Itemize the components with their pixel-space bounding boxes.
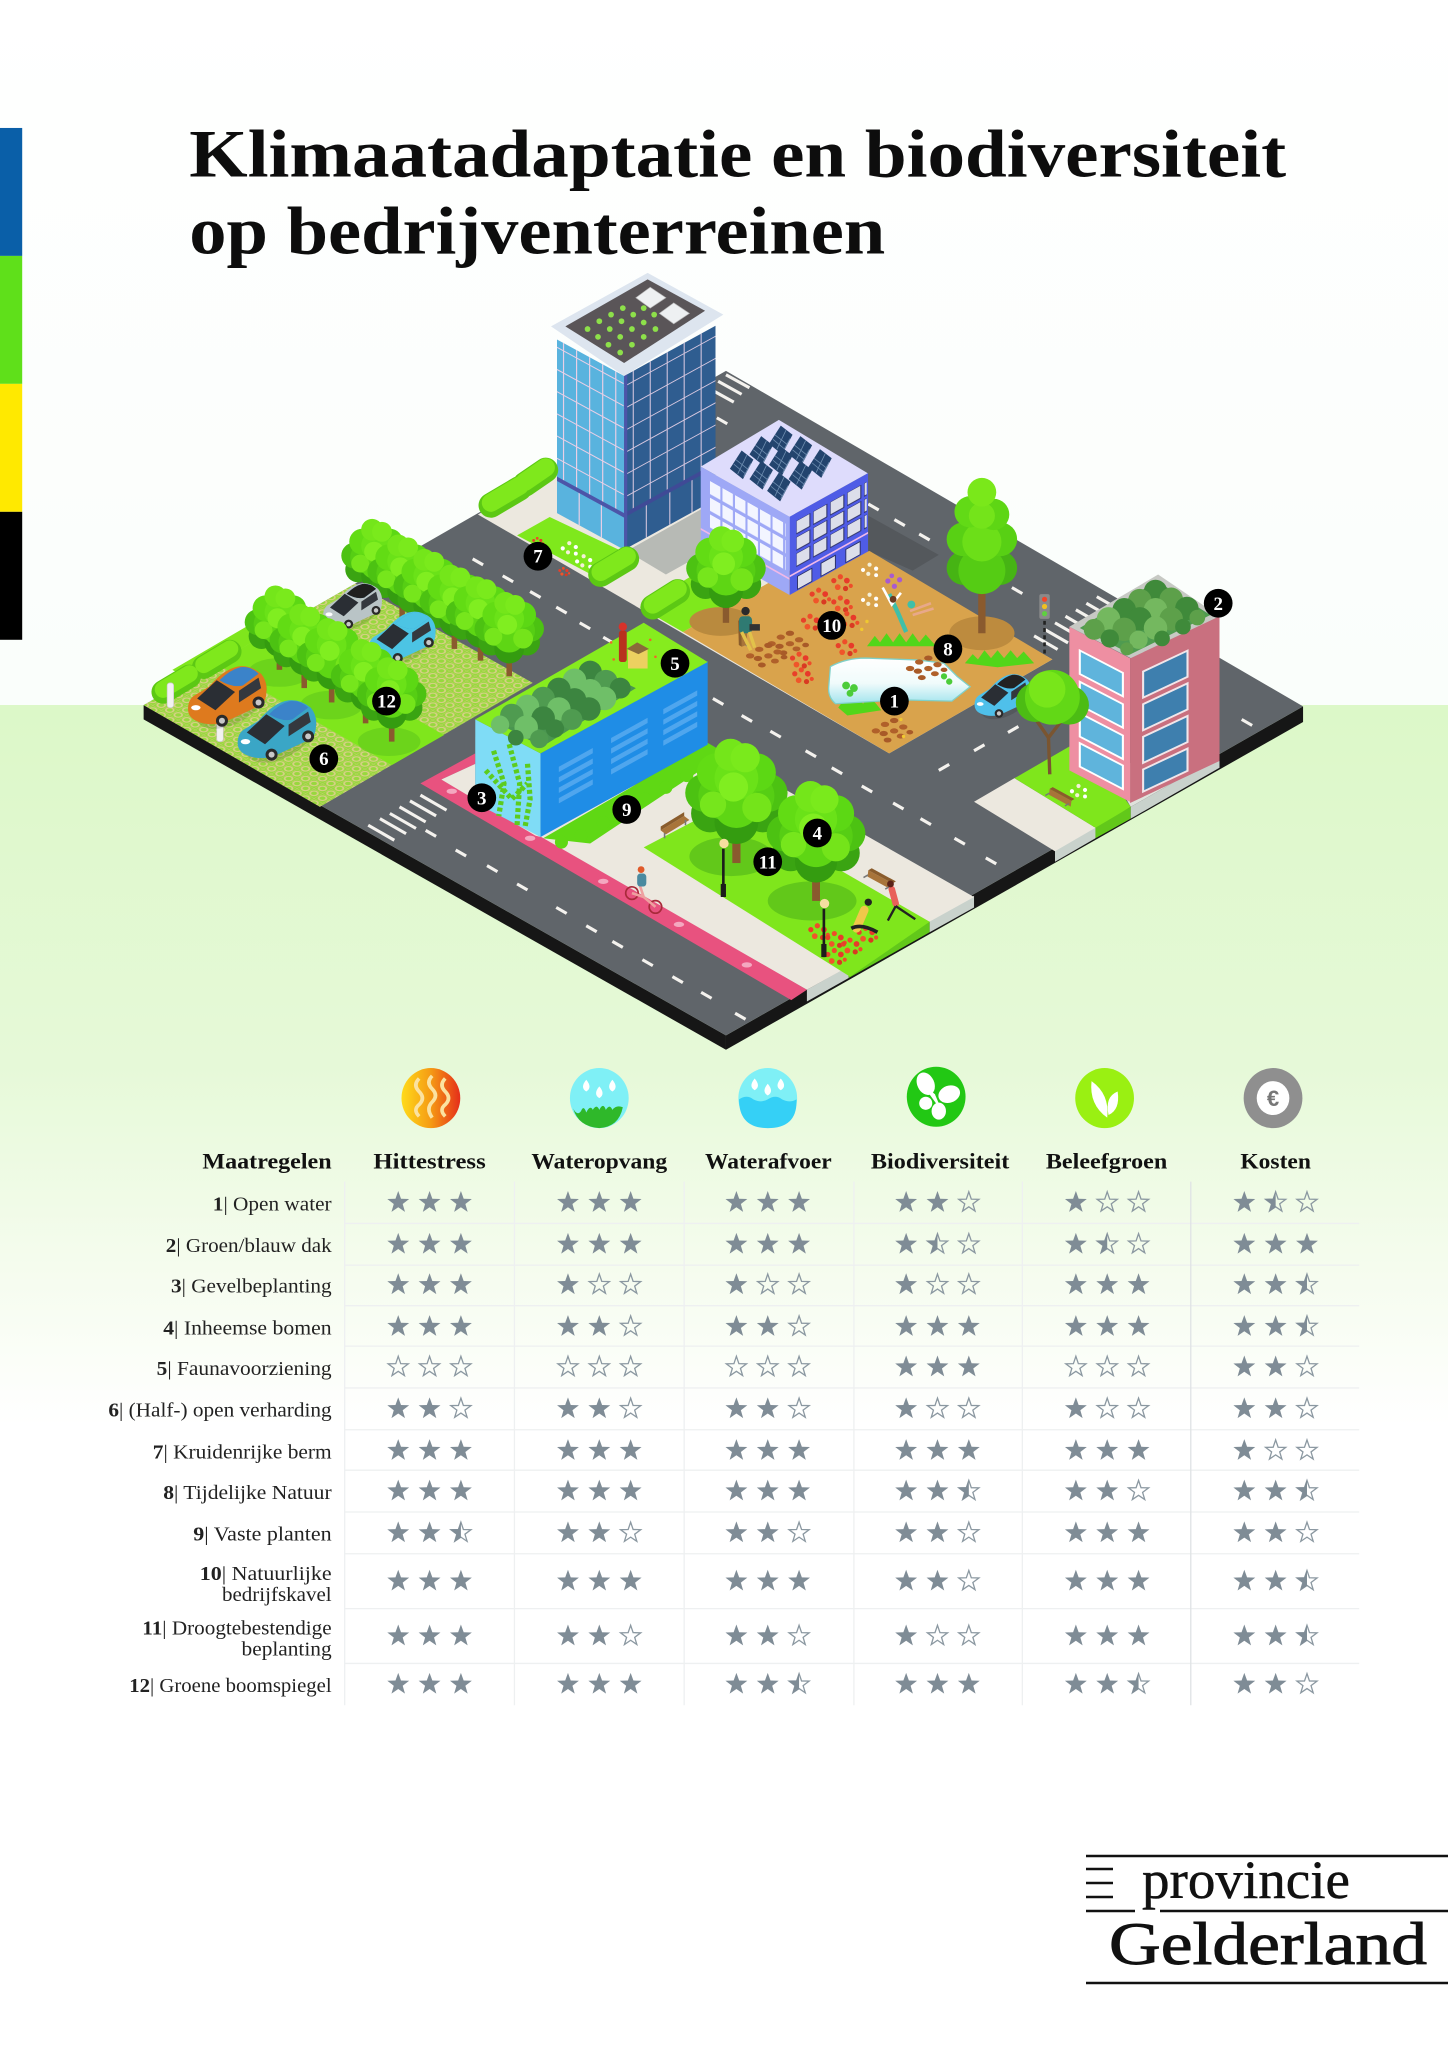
lamp posts	[719, 839, 829, 957]
lot with pink building	[974, 738, 1220, 851]
marker 2	[1204, 589, 1233, 618]
beekeeper and hive	[610, 623, 657, 669]
icon: costs: €	[1267, 1086, 1279, 1111]
roof	[1069, 574, 1220, 658]
marker 3: 3	[477, 788, 487, 809]
cyclist	[626, 866, 662, 913]
icon: heat	[401, 1068, 460, 1128]
bench near pink building	[1044, 781, 1077, 815]
base slab	[144, 371, 1303, 1050]
marker 4	[803, 819, 832, 847]
number markers	[309, 542, 1233, 876]
row 11 Droogtebestendige beplanting: beplanting	[242, 1639, 332, 1661]
table headers: Kosten	[1240, 1149, 1311, 1174]
tree at pink building	[1016, 670, 1089, 774]
row 7 Kruidenrijke berm: 7| Kruidenrijke berm	[153, 1441, 332, 1463]
row 4 Inheemse bomen: 4| Inheemse bomen	[163, 1317, 332, 1339]
table headers: Beleefgroen	[1046, 1149, 1167, 1174]
colour bar	[0, 128, 22, 640]
grass tufts	[838, 633, 1034, 716]
icon row	[401, 1067, 1302, 1128]
row 1 Open water: 1| Open water	[213, 1193, 332, 1215]
row 9 Vaste planten: 9| Vaste planten	[193, 1524, 332, 1546]
marker 7	[524, 542, 552, 571]
marker 6	[309, 744, 338, 773]
person lying in grass	[883, 588, 934, 632]
flower bed in garden	[808, 923, 878, 965]
orange plot details	[689, 563, 1015, 743]
benches	[661, 812, 899, 899]
marker 9: 9	[622, 800, 631, 821]
person on bench	[728, 607, 761, 650]
table headers: Hittestress	[373, 1149, 486, 1174]
white flowers near pink building	[1070, 784, 1087, 798]
trees on plaza	[686, 478, 1017, 633]
row 3 Gevelbeplanting: 3| Gevelbeplanting	[171, 1276, 332, 1298]
left wall	[701, 467, 790, 595]
roof units	[636, 287, 689, 324]
marker 6: 6	[319, 749, 329, 770]
cyan car	[367, 609, 444, 675]
shadow on road	[868, 516, 939, 571]
row 10 Natuurlijke bedrijfskavel: 10| Natuurlijke	[200, 1563, 332, 1585]
green roof plants	[491, 661, 636, 748]
icon: butterfly	[907, 1067, 966, 1127]
marker 5: 5	[670, 654, 680, 675]
blue wall	[541, 661, 708, 837]
hedges	[491, 467, 678, 607]
orange plot	[683, 551, 1052, 753]
tall office building	[551, 273, 723, 550]
solar panels	[730, 426, 832, 501]
marker 12: 12	[377, 692, 396, 713]
orange car	[186, 663, 276, 740]
row 2 Groen/blauw dak: 2| Groen/blauw dak	[166, 1235, 333, 1257]
green roof plants	[1080, 580, 1210, 655]
row 6 (Half-) open verharding: 6| (Half-) open verharding	[108, 1400, 332, 1422]
icon: leaves	[1075, 1068, 1134, 1128]
charging posts	[167, 683, 223, 742]
row 12 Groene boomspiegel: 12| Groene boomspiegel	[129, 1675, 332, 1697]
marker 8	[934, 635, 962, 663]
icon: water capture	[570, 1068, 629, 1128]
right wall	[1130, 616, 1220, 803]
marker 1: 1	[890, 692, 899, 713]
roof plants	[585, 305, 658, 355]
row 10 Natuurlijke bedrijfskavel	[200, 1563, 1317, 1606]
garden trees	[685, 739, 865, 901]
row 3 Gevelbeplanting	[171, 1273, 1317, 1298]
purple office building with solar roof	[701, 420, 868, 595]
title: Klimaatadaptatie en biodiversiteit	[189, 116, 1287, 191]
marker 9	[612, 795, 641, 824]
pink building with green roof	[1069, 574, 1220, 803]
icon: water discharge	[738, 1068, 797, 1128]
parking trees front row	[245, 585, 426, 742]
right wall	[790, 473, 868, 595]
parking block	[144, 584, 533, 807]
isometric illustration	[144, 273, 1303, 1050]
traffic light	[1039, 594, 1050, 657]
row 4 Inheemse bomen	[163, 1315, 1317, 1339]
title	[189, 116, 1287, 268]
table headers: Biodiversiteit	[871, 1149, 1010, 1174]
row 2 Groen/blauw dak	[166, 1233, 1318, 1257]
row 1 Open water	[213, 1191, 1317, 1215]
silver car	[322, 581, 389, 639]
marker 3	[467, 783, 496, 812]
zebra crossings	[368, 375, 1120, 840]
table headers: Wateropvang	[531, 1149, 667, 1174]
right wall	[624, 326, 716, 550]
lower block with sidewalk and garden	[535, 747, 974, 990]
icon: costs	[1244, 1068, 1302, 1128]
left wall	[1069, 627, 1130, 802]
blue car	[236, 697, 326, 774]
table headers: Maatregelen	[202, 1149, 332, 1174]
row 7 Kruidenrijke berm	[153, 1439, 1317, 1463]
marker 10: 10	[822, 616, 841, 637]
cycle lane	[420, 753, 807, 1000]
parking trees back row	[341, 519, 544, 676]
plaza block	[478, 423, 1052, 753]
marker 2: 2	[1213, 594, 1223, 615]
parking hedges	[163, 649, 230, 692]
marker 7: 7	[533, 547, 543, 568]
marker 5	[661, 649, 689, 678]
blue building with green roof	[475, 623, 708, 837]
left wall	[557, 339, 624, 550]
row 8 Tijdelijke Natuur: 8| Tijdelijke Natuur	[163, 1482, 332, 1504]
row 11 Droogtebestendige beplanting: 11| Droogtebestendige	[142, 1618, 332, 1640]
marker 8: 8	[943, 639, 953, 660]
hedge along blue building	[543, 743, 726, 849]
row 9 Vaste planten	[193, 1521, 1317, 1546]
marker 10	[817, 611, 846, 640]
marker 4: 4	[813, 824, 823, 845]
ratings table	[108, 1191, 1318, 1697]
table headers: Waterafvoer	[705, 1149, 832, 1174]
table headers	[202, 1149, 1311, 1174]
row 12 Groene boomspiegel	[129, 1673, 1317, 1697]
ivy wall	[475, 719, 541, 837]
row 5 Faunavoorziening: 5| Faunavoorziening	[157, 1358, 332, 1380]
row 10 Natuurlijke bedrijfskavel: bedrijfskavel	[222, 1584, 332, 1606]
marker 11	[753, 847, 782, 876]
row 8 Tijdelijke Natuur	[163, 1480, 1317, 1504]
logo: provincie Gelderland: provincie	[1142, 1850, 1350, 1910]
pond	[829, 655, 970, 704]
row 5 Faunavoorziening	[157, 1356, 1317, 1380]
gardeners	[851, 881, 915, 932]
marker 12	[372, 687, 401, 716]
patches near tower	[517, 509, 731, 632]
cyan smart car	[973, 672, 1038, 727]
logo: provincie Gelderland	[1086, 1850, 1448, 1983]
row 6 (Half-) open verharding	[108, 1397, 1317, 1422]
roads dashes	[426, 418, 1252, 1019]
roof	[701, 420, 868, 517]
roof	[475, 623, 708, 753]
row 11 Droogtebestendige beplanting	[142, 1618, 1317, 1661]
roof	[551, 273, 723, 376]
logo: provincie Gelderland: Gelderland	[1109, 1911, 1427, 1977]
title: op bedrijventerreinen	[189, 193, 885, 268]
marker 1	[880, 687, 909, 716]
marker 11: 11	[759, 852, 777, 873]
